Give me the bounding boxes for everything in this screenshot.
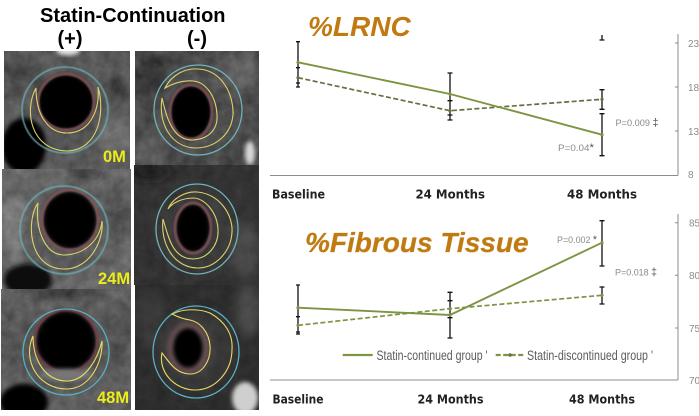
p-value: 0.009: P=0.009 ‡ (616, 117, 658, 129)
x-axis labels: 24 Months (416, 188, 485, 202)
panel: statin discontinued at 24 months (130, 164, 259, 285)
panel: statin continued at 24 months (2, 169, 131, 289)
axis values: 8 (688, 170, 694, 181)
legend (343, 348, 653, 363)
x-axis labels (272, 392, 635, 406)
heading: Statin-Continuation: Statin-Continuation (40, 5, 226, 27)
series: statin-discontinued group (296, 76, 604, 112)
chart: %LRNC line chart (270, 34, 699, 202)
series: statin-continued group (296, 61, 604, 136)
chart: %Fibrous Tissue line chart (270, 214, 699, 406)
column label: statin discontinued (-): (-) (187, 28, 207, 50)
x-axis labels: Baseline (272, 392, 324, 406)
title: %Fibrous Tissue: %Fibrous Tissue (305, 227, 529, 258)
panel: statin continued at 48 months (0, 286, 134, 416)
legend: Statin-discontinued group ' (527, 348, 653, 363)
panel: statin continued at 0 months (4, 51, 130, 169)
x-axis labels: 48 Months (567, 188, 637, 202)
series: statin-continued group (296, 241, 604, 317)
x-axis labels: 48 Months (569, 392, 635, 406)
label: 24M: 24M (98, 270, 130, 288)
p-value: 0.018: P=0.018 ‡ (615, 266, 657, 278)
axis values: 18 (688, 83, 699, 94)
label: 0M: 0M (103, 148, 126, 166)
error bars (296, 221, 604, 338)
panel: statin discontinued at 0 months (134, 51, 259, 166)
panel: statin discontinued at 48 months (135, 284, 260, 414)
label: 48M: 48M (97, 389, 129, 407)
axis values (689, 218, 699, 387)
title: %LRNC: %LRNC (308, 11, 411, 42)
column label: statin continued (+): (+) (58, 28, 82, 50)
p-value: 0.002: P=0.002 * (557, 234, 598, 246)
p-value: 0.04: P=0.04* (558, 142, 595, 154)
axis values: 23 (688, 39, 699, 50)
x-axis labels: Baseline (272, 188, 325, 202)
axis values: 13 (688, 127, 699, 138)
x-axis labels (272, 188, 637, 202)
series: statin-discontinued group (296, 294, 604, 327)
legend: Statin-continued group ' (376, 348, 488, 363)
x-axis labels: 24 Months (418, 392, 484, 406)
axis values (688, 39, 699, 181)
error bars (296, 35, 604, 156)
